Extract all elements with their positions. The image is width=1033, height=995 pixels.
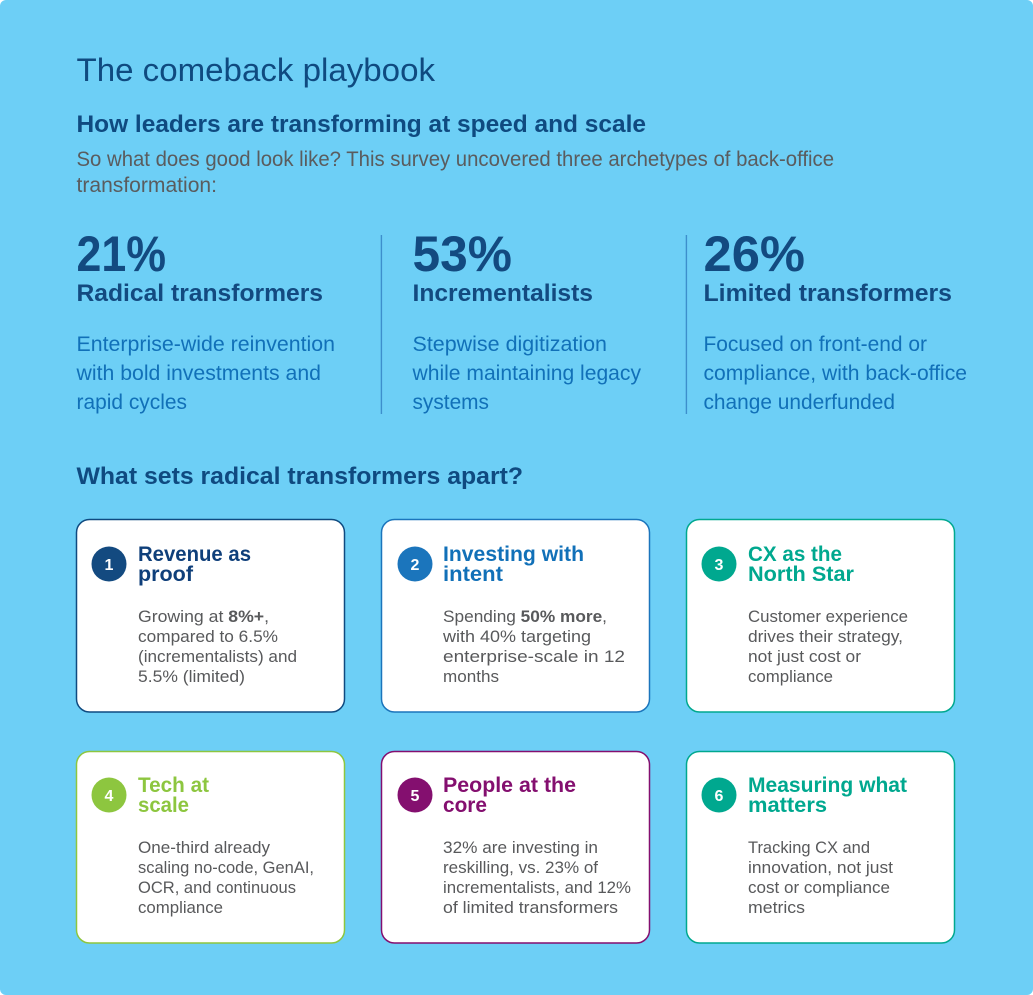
- heading: what sets radical transformers apart: What sets radical transformers apart?: [76, 463, 523, 490]
- card 2: investing with intent: intent: [443, 562, 503, 586]
- archetype: radical transformers: Enterprise-wide reinvention: [76, 333, 335, 356]
- card 5: people at the core: People at the: [443, 773, 576, 797]
- card 2: investing with intent: [382, 520, 650, 712]
- card 4: tech at scale: scaling no-code, GenAI,: [138, 858, 314, 877]
- archetype: incrementalists: while maintaining legacy: [411, 362, 641, 385]
- archetype: radical transformers: Radical transformers: [76, 280, 323, 307]
- icon: number 6: 6: [715, 788, 724, 805]
- icon: number 1: [92, 546, 126, 582]
- archetype: limited transformers: Focused on front-end or: [704, 333, 927, 356]
- card 1: revenue as proof: compared to 6.5%: [138, 627, 278, 646]
- icon: number 2: [398, 546, 432, 582]
- card 6: measuring what matters: [686, 752, 954, 943]
- archetype: limited transformers: 26%: [704, 226, 805, 282]
- card 6: measuring what matters: metrics: [748, 898, 805, 917]
- card 2: investing with intent: Spending 50% more,: [443, 607, 607, 626]
- intro text: So what does good look like? This survey uncovered three archetypes of back-office: [76, 147, 834, 171]
- card 3: CX as the North Star: CX as the: [748, 542, 842, 566]
- card 3: CX as the North Star: [686, 520, 954, 712]
- card 1: revenue as proof: Growing at 8%+,: [138, 607, 269, 626]
- archetype: incrementalists: [411, 226, 641, 414]
- archetype: radical transformers: 21%: [76, 226, 166, 282]
- card 2: investing with intent: with 40% targeting: [442, 627, 591, 646]
- archetype: incrementalists: Stepwise digitization: [412, 333, 607, 356]
- card 5: people at the core: incrementalists, and 12%: [443, 878, 631, 897]
- title: The comeback playbook: [76, 52, 436, 88]
- card 5: people at the core: core: [443, 793, 487, 817]
- card 4: tech at scale: [76, 752, 344, 943]
- card 5: people at the core: 32% are investing in: [443, 838, 598, 857]
- icon: number 5: [398, 778, 432, 812]
- card 5: people at the core: of limited transformers: [443, 898, 618, 917]
- archetype: incrementalists: systems: [412, 391, 489, 414]
- icon: number 3: [702, 546, 736, 582]
- card 4: tech at scale: scale: [138, 793, 189, 817]
- card 1: revenue as proof: (incrementalists) and: [138, 647, 297, 666]
- archetype: incrementalists: 53%: [412, 226, 512, 282]
- card 1: revenue as proof: 5.5% (limited): [138, 667, 245, 686]
- card 1: revenue as proof: [76, 520, 344, 712]
- archetype: radical transformers: with bold investments and: [75, 362, 321, 385]
- card 3: CX as the North Star: Customer experience: [748, 607, 908, 626]
- icon: number 2: 2: [411, 557, 420, 574]
- card 6: measuring what matters: innovation, not just: [748, 858, 893, 877]
- card 3: CX as the North Star: drives their strategy,: [748, 627, 903, 646]
- archetype: limited transformers: [704, 226, 967, 414]
- card 4: tech at scale: One-third already: [138, 838, 271, 857]
- card 2: investing with intent: Investing with: [443, 542, 584, 566]
- icon: number 6: [702, 778, 736, 812]
- archetype: radical transformers: rapid cycles: [76, 391, 187, 414]
- icon: number 4: 4: [105, 788, 114, 805]
- icon: number 1: 1: [105, 557, 114, 574]
- heading: how leaders are transforming: How leaders are transforming at speed and scale: [76, 111, 646, 138]
- card 5: people at the core: reskilling, vs. 23% of: [443, 858, 598, 877]
- card 1: revenue as proof: proof: [138, 562, 194, 586]
- card 1: revenue as proof: Revenue as: [138, 542, 251, 566]
- intro text: [76, 147, 834, 197]
- card 4: tech at scale: compliance: [138, 898, 223, 917]
- card 6: measuring what matters: Tracking CX and: [748, 838, 870, 857]
- card 5: people at the core: [382, 752, 650, 943]
- card 4: tech at scale: Tech at: [138, 773, 209, 797]
- icon: number 5: 5: [411, 788, 420, 805]
- icon: number 4: [92, 778, 126, 812]
- intro text: transformation:: [76, 173, 217, 197]
- archetype: limited transformers: compliance, with back-office: [704, 362, 967, 385]
- card 6: measuring what matters: Measuring what: [748, 773, 907, 797]
- archetype: radical transformers: [75, 226, 335, 414]
- card 3: CX as the North Star: compliance: [748, 667, 833, 686]
- card 2: investing with intent: enterprise-scale in 12: [443, 647, 625, 666]
- archetype: incrementalists: Incrementalists: [412, 280, 593, 307]
- card 4: tech at scale: OCR, and continuous: [138, 878, 296, 897]
- icon: number 3: 3: [715, 557, 724, 574]
- archetype: limited transformers: Limited transformers: [704, 280, 952, 307]
- archetype: limited transformers: change underfunded: [704, 391, 895, 414]
- card 3: CX as the North Star: not just cost or: [748, 647, 861, 666]
- card 6: measuring what matters: cost or compliance: [748, 878, 890, 897]
- card 6: measuring what matters: matters: [748, 793, 827, 817]
- card 2: investing with intent: months: [443, 667, 499, 686]
- card 3: CX as the North Star: North Star: [748, 562, 855, 586]
